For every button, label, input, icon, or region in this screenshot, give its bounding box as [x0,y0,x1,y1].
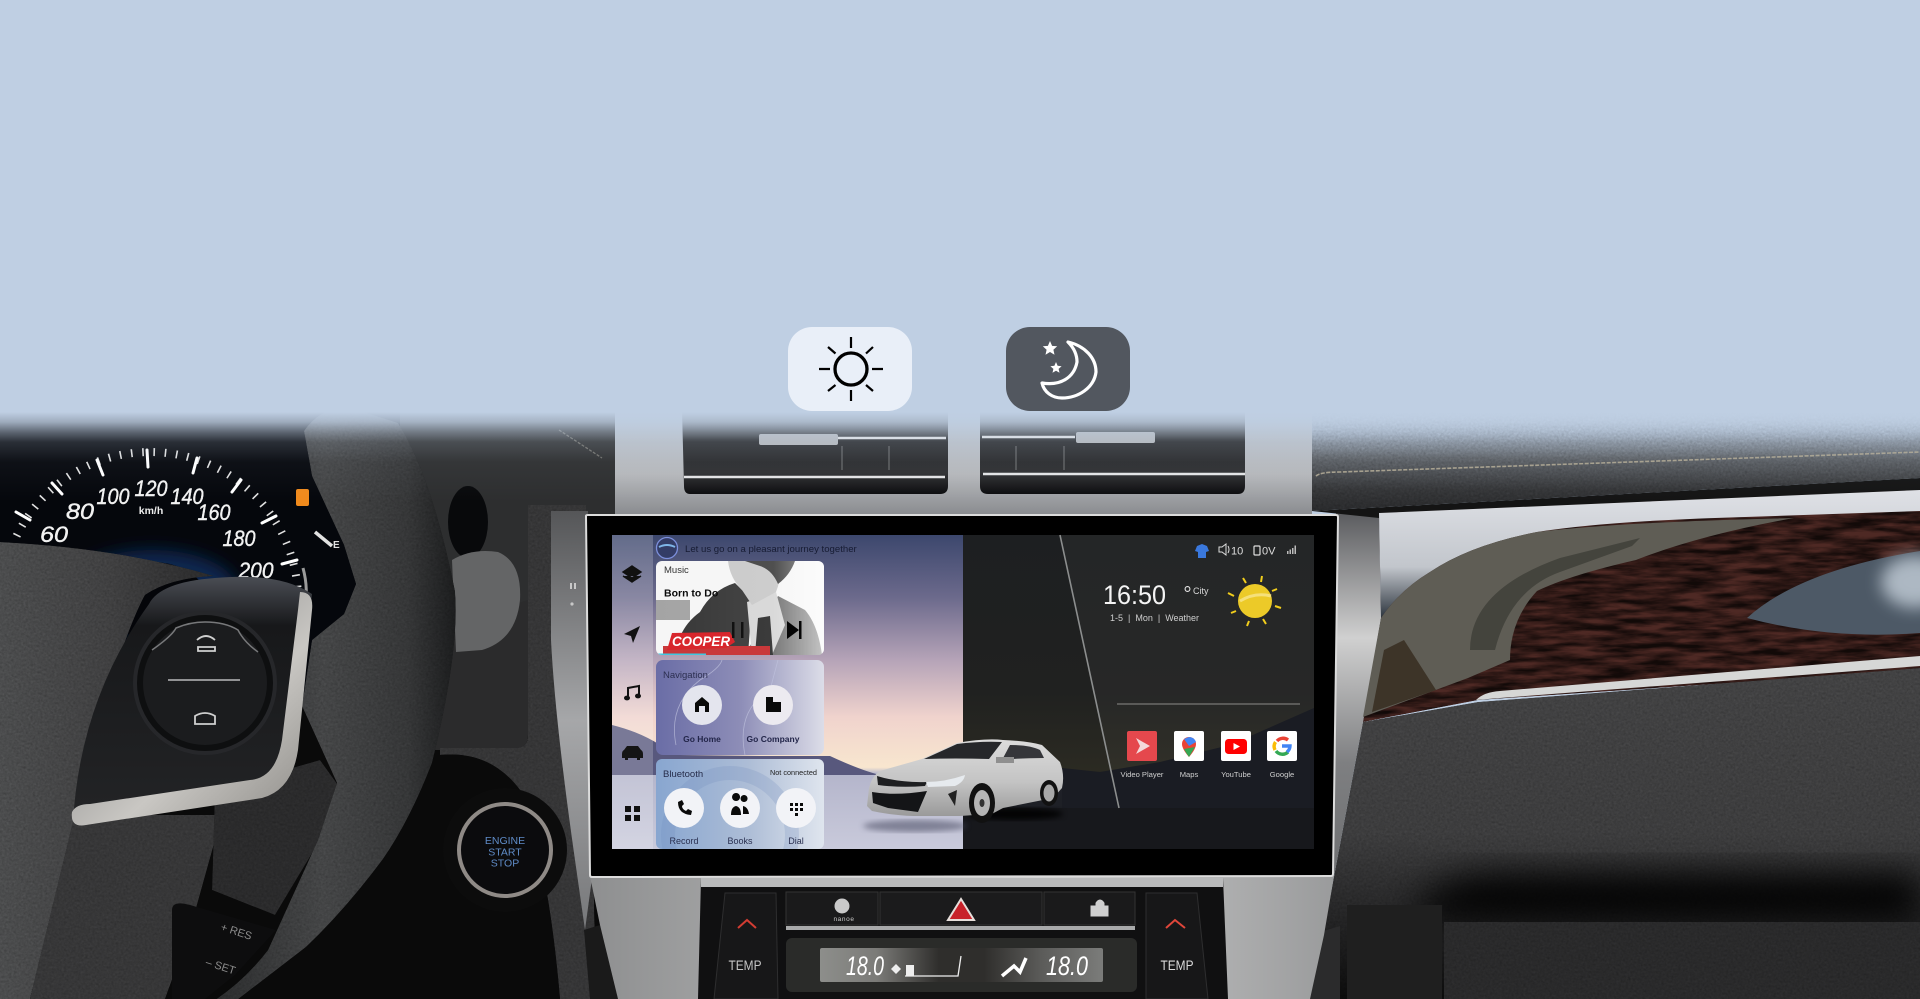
centre console leather [440,505,596,999]
silver ring [459,804,551,896]
minor ticks [2,452,298,748]
diagonal light line [1060,535,1119,808]
dial divider [168,679,240,681]
icon: phone [678,800,692,815]
dial label: Dial [788,836,804,846]
lower dashboard leather [1320,668,1920,999]
connection status: Not connected [770,768,817,777]
display bezel [586,515,1338,877]
instrument cluster housing [0,406,530,710]
icon: layers [623,566,641,582]
lock icon [1091,900,1108,916]
dial gloss upper [152,622,258,652]
map lines [674,660,778,755]
nanoe button [786,892,878,925]
upper grille [877,776,927,787]
record label: Record [669,836,699,846]
icon: speaker [1219,544,1229,555]
vent slat lines [982,437,1245,474]
up arrow [1166,920,1185,928]
unit label: km/h [139,505,163,517]
books button [720,788,760,828]
greeting text: Let us go on a pleasant journey together [685,544,858,555]
night panel lighter section [1060,535,1314,808]
button label: ENGINE [485,835,525,847]
car illustration [863,739,1063,832]
app: video player [1121,731,1164,779]
night mountains [1062,708,1314,808]
speed numbers: 80 [66,499,95,524]
front wheel [969,783,995,823]
icon: large star [1043,341,1057,355]
vent slat lines [684,438,946,477]
fuel empty label: E [333,540,340,551]
vent clamp [1076,432,1155,443]
glovebox side panel [1347,905,1442,999]
speedometer [2,450,340,748]
button label [485,835,525,870]
right side silver column [1324,513,1381,930]
left dash stitching [559,430,602,458]
speed numbers: 200 [238,558,274,583]
dark gap under dash [1312,478,1920,518]
climate display [786,938,1137,992]
speed numbers: 60 [40,522,69,547]
car interior dashboard [0,405,1920,999]
lower wheel hub [30,815,222,999]
dark jacket left [682,583,750,646]
fuel gauge [315,532,332,546]
label: YouTube [1221,770,1251,779]
go home label: Go Home [683,734,721,744]
music card [656,561,824,655]
cooper red band [663,646,770,655]
sun rays [1228,576,1281,626]
icon: music note [628,686,639,698]
lcd window [820,948,1103,982]
app: youtube [1221,731,1251,779]
fan icon [891,964,901,974]
icon: keypad [790,803,803,816]
bluetooth card [656,759,824,897]
app: maps [1174,731,1204,779]
up arrow [738,920,756,928]
navigation card [656,660,824,755]
start stop button [443,788,567,912]
books label: Books [727,836,753,846]
silver surround [590,876,1334,999]
icon: small star [1050,362,1062,373]
right air vent [980,410,1245,494]
gauge edge [303,568,306,610]
side windows [1002,745,1044,760]
icon: shirt [1195,544,1209,558]
button label: STOP [491,858,519,870]
front grille [872,791,927,812]
dial button [776,788,816,828]
location pin [1185,587,1190,591]
progress bar [656,654,706,655]
major ticks [16,450,297,564]
go company button [753,685,793,725]
reflected pattern on wood [1470,538,1640,650]
call answer icon [197,636,215,651]
lower right bracket edge [1305,926,1340,999]
side air vent [948,790,957,806]
location: City [1193,586,1209,596]
fuel warning icon [296,489,309,506]
music note heads [624,694,641,700]
icon: sun [819,337,883,401]
steering wheel [0,406,456,999]
music label: Music [664,565,689,576]
right temperature: 18.0 [1046,951,1088,981]
blue reflection on wood [1747,551,1920,635]
left air vent [682,410,948,494]
reflection highlight [1881,556,1920,608]
icon: home [695,697,709,712]
upper dashboard right [1300,405,1920,511]
cooper logo: COOPER [672,633,731,649]
left temp button [714,893,778,999]
temp label: TEMP [1160,958,1194,973]
app divider [1117,703,1300,705]
car body [867,739,1063,816]
next control [787,621,802,639]
shirt [747,592,785,655]
bottom climate console [590,876,1334,999]
bluetooth label: Bluetooth [663,769,703,780]
lock button [1044,892,1135,925]
button: night mode [1006,327,1130,411]
cooper logo plate [667,632,735,650]
car shadow night [967,808,1063,820]
dial centre [97,562,207,638]
icon: battery [1254,546,1260,555]
hazard triangle [948,899,974,920]
cruise stalk [172,903,276,999]
black control panel [698,878,1228,999]
speed numbers: 180 [222,526,256,551]
panel behind wheel [430,600,528,750]
fan level bar [905,956,961,976]
temp label: TEMP [728,958,762,973]
hazard button [880,892,1042,925]
rim [215,406,456,999]
bezel indicator marks [570,583,576,606]
icon: crescent moon [1042,342,1096,398]
speed numbers [40,476,274,583]
day mode panel [612,535,963,849]
logo [656,538,678,558]
display unit [586,515,1338,897]
voltage value: 0V [1262,546,1276,558]
set label: – SET [204,956,237,977]
silver panel lip [701,878,1223,887]
top dash left section [400,406,615,745]
hub dark leather [212,760,338,915]
jacket right [745,596,822,655]
glovebox lower panel [1444,922,1920,999]
decorative arc [668,773,792,897]
gauge shadow right of wheel [448,486,488,558]
button label: START [488,846,522,858]
lower left dark area [0,700,620,999]
sky fade over dashboard [0,402,1920,502]
airflow icon [1002,958,1026,976]
call end icon [195,713,215,724]
clock: 16:50 [1103,580,1166,610]
label: Google [1270,770,1294,779]
nanoe text: nanoe [833,916,855,923]
turn signal stalk [452,551,520,652]
day mountains [612,725,880,775]
silver trim reflection [1379,490,1920,618]
speed numbers: 140 [170,484,204,509]
left temperature: 18.0 [846,951,884,981]
hair [745,561,795,584]
fan level block [906,965,914,976]
control pad [72,577,312,825]
night mode panel [963,535,1314,849]
headlight [926,775,965,787]
blue dial glow [67,550,237,630]
volume value: 10 [1231,546,1243,558]
icon: app grid [625,806,640,821]
night floor [963,808,1314,849]
song title: Born to Do [664,588,718,600]
icon: sun weather [1228,576,1281,626]
navigation label: Navigation [663,670,708,681]
stitching line [1316,452,1920,476]
speed numbers: 160 [198,500,231,525]
icon: building [766,697,781,712]
glovebox shadow [1410,875,1920,920]
res label: + RES [219,921,253,943]
left spoke [0,542,214,999]
street background [656,600,690,620]
speed numbers: 100 [96,484,130,509]
label: Video Player [1121,770,1164,779]
icon: car [622,746,643,760]
status bar [1195,544,1296,558]
record button [664,788,704,828]
button: day mode [788,327,912,411]
speed numbers: 120 [134,476,168,501]
mirror [996,757,1014,763]
silver pad trim [72,592,312,825]
vent clamp [759,434,838,445]
pause control [732,622,744,638]
dial inner [143,621,267,745]
wood trim base [1363,490,1920,722]
olive reflection on wood [1363,518,1794,717]
sidebar [612,535,653,849]
right temp button [1146,893,1208,999]
silver strip under buttons [786,926,1135,930]
car shadow [863,820,967,832]
phone control dial [135,613,275,753]
lower left bracket edge [584,925,618,999]
icon: signal [1287,546,1296,554]
tie [755,616,773,655]
label: Maps [1180,770,1198,779]
silver strip under wood [1476,656,1920,700]
go home button [682,685,722,725]
rear wheel [1040,780,1058,806]
left screen trim [551,511,592,930]
nanoe icon [834,898,850,914]
centre vent bracket [615,405,1312,520]
icon: contacts [731,793,749,815]
face [728,561,780,605]
go company label: Go Company [747,734,800,744]
windshield [924,742,1002,759]
date line: 1-5 | Mon | Weather [1110,613,1199,623]
app: google [1267,731,1297,779]
icon: navigation arrow [624,626,640,643]
